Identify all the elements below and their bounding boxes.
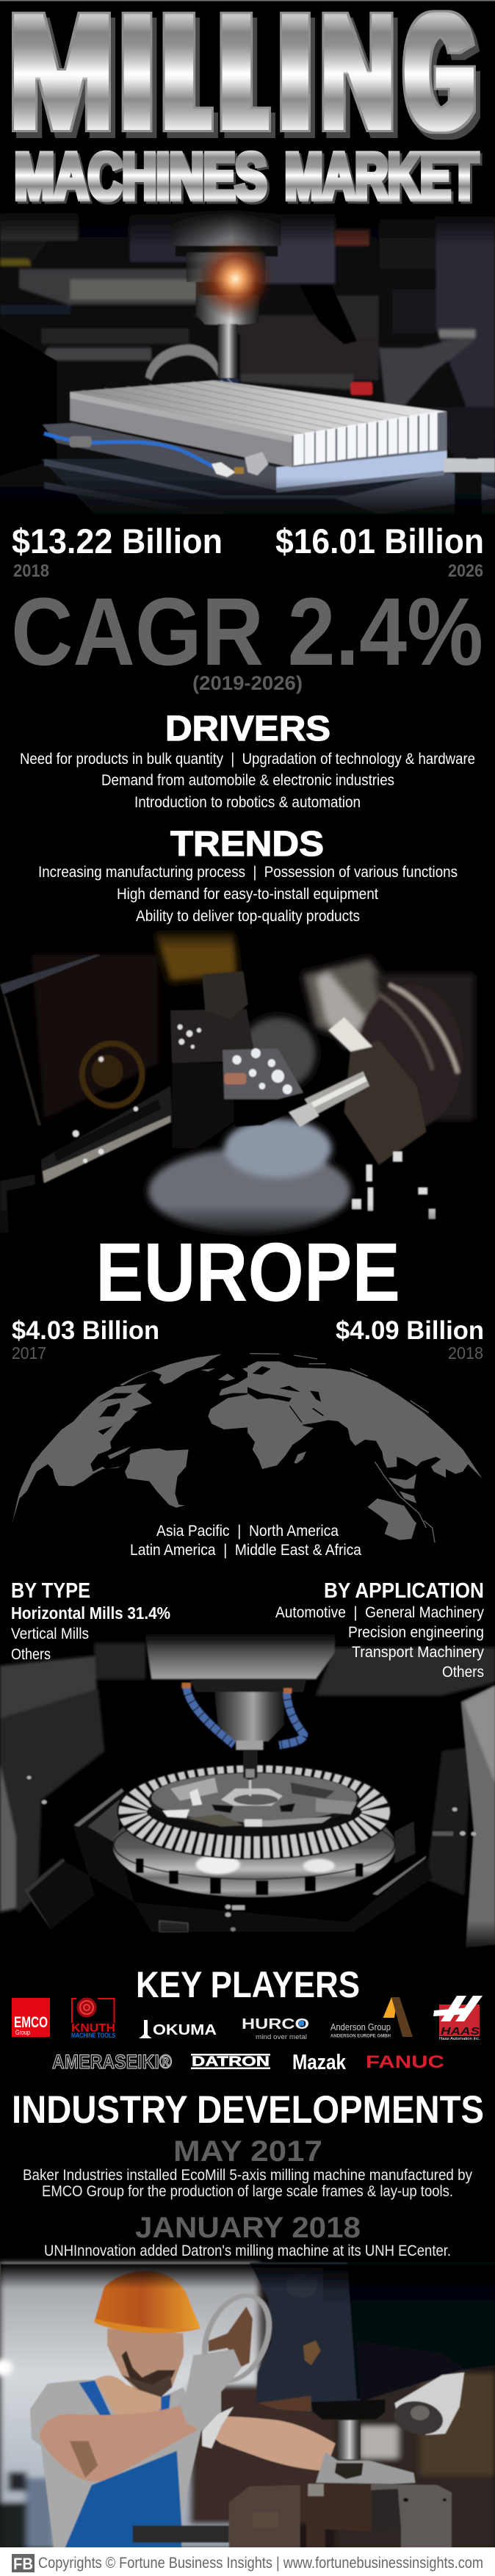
footer bar bbox=[0, 2547, 495, 2576]
other regions list: Asia Pacific | North America bbox=[156, 1523, 339, 1540]
photo: bevel gear on CNC milling table bbox=[0, 1620, 495, 1971]
application list: Transport Machinery bbox=[352, 1644, 484, 1661]
panel: by type bbox=[11, 1579, 170, 1663]
trends list bbox=[38, 864, 458, 925]
market size 2026 bbox=[275, 522, 484, 581]
logo: Anderson Group bbox=[330, 1997, 413, 2039]
Europe 2018 value: $4.09 Billion bbox=[336, 1316, 484, 1345]
market size 2026: $16.01 Billion bbox=[275, 522, 484, 560]
drivers list: Introduction to robotics & automation bbox=[134, 794, 361, 811]
panel: company logos bbox=[12, 1996, 483, 2074]
drivers list: Demand from automobile & electronic industries bbox=[101, 772, 394, 789]
panel: drivers bbox=[20, 710, 475, 811]
CAGR period: (2019-2026) bbox=[192, 672, 303, 694]
Europe 2017 value: 2017 bbox=[12, 1343, 46, 1363]
heading: drivers: DRIVERS bbox=[165, 710, 330, 748]
logo: KNUTH bbox=[71, 1998, 115, 2039]
title line one: MILLING bbox=[8, 0, 472, 165]
logo: Anderson Group: ANDERSON EUROPE GMBH bbox=[330, 2033, 391, 2039]
type list: Horizontal Mills 31.4% bbox=[11, 1603, 170, 1623]
logo: HAAS bbox=[433, 1996, 483, 2041]
development: January 2018: JANUARY 2018 bbox=[135, 2212, 361, 2244]
application list: Others bbox=[442, 1664, 484, 1681]
title: chrome lettering bbox=[8, 0, 478, 214]
logo: KNUTH: MACHINE TOOLS bbox=[71, 2032, 115, 2039]
logo: HURCO: mind over metal bbox=[256, 2033, 307, 2041]
heading: key players: KEY PLAYERS bbox=[136, 1964, 360, 2005]
Europe 2017 value bbox=[12, 1316, 159, 1363]
application list bbox=[275, 1604, 484, 1681]
panel: trends bbox=[38, 825, 458, 925]
market size 2018 bbox=[12, 522, 223, 581]
other regions list: Latin America | Middle East & Africa bbox=[130, 1542, 361, 1559]
logo: EMCO bbox=[12, 1998, 50, 2037]
trends list: High demand for easy-to-install equipment bbox=[117, 886, 378, 903]
development: January 2018 bbox=[44, 2212, 451, 2259]
fades bbox=[0, 1620, 495, 1648]
photo: worker operating milling machine bbox=[0, 2262, 495, 2549]
logo: HAAS: Haas Automation Inc. bbox=[439, 2037, 480, 2041]
photo: lathe tool with metal chips bbox=[0, 924, 495, 1260]
development: May 2017: MAY 2017 bbox=[173, 2135, 322, 2168]
logo: HURCO bbox=[242, 2016, 309, 2041]
heading: by type: BY TYPE bbox=[11, 1579, 90, 1603]
logo: HURCO: HURCO bbox=[242, 2016, 309, 2032]
panel: by application bbox=[275, 1579, 484, 1681]
fades bbox=[0, 2264, 495, 2289]
logo: HAAS: HAAS bbox=[441, 2025, 480, 2038]
logo: Datron: DATRON bbox=[192, 2054, 270, 2068]
photo fades bbox=[0, 209, 495, 245]
Europe 2018 value bbox=[336, 1316, 484, 1363]
logo: EMCO: EMCO bbox=[14, 2014, 48, 2031]
title line two: MACHINES MARKET: MACHINES bbox=[15, 140, 267, 214]
logo: Mazak: Mazak bbox=[292, 2051, 347, 2074]
logo: Fortune Business Insights: FB bbox=[13, 2555, 33, 2573]
market size 2018: 2018 bbox=[13, 561, 49, 581]
type list bbox=[11, 1603, 170, 1663]
type list: Vertical Mills bbox=[11, 1626, 89, 1642]
logo: EMCO: Group bbox=[15, 2029, 30, 2036]
logo: KNUTH: KNUTH bbox=[71, 2022, 115, 2035]
logo: Amera Seiki: AMERASEIKI® bbox=[52, 2051, 172, 2073]
type list: Others bbox=[11, 1646, 51, 1663]
Europe 2017 value: $4.03 Billion bbox=[12, 1316, 159, 1345]
logo: OKUMA bbox=[139, 2020, 217, 2038]
fades bbox=[0, 924, 495, 949]
logo: Anderson Group: Anderson Group bbox=[330, 2021, 391, 2032]
photo: milling machine spindle over aluminium block bbox=[0, 209, 495, 523]
heading: trends: TRENDS bbox=[170, 825, 324, 864]
other regions list bbox=[130, 1523, 361, 1559]
market size 2026: 2026 bbox=[448, 561, 483, 581]
logo: OKUMA: OKUMA bbox=[153, 2022, 217, 2038]
market size 2018: $13.22 Billion bbox=[12, 522, 223, 560]
logo: Datron bbox=[191, 2054, 270, 2069]
icon: world globe map bbox=[12, 1354, 483, 1543]
trends list: Increasing manufacturing process | Possession of various functions bbox=[38, 864, 458, 881]
heading: Europe: EUROPE bbox=[95, 1226, 400, 1318]
trends list: Ability to deliver top-quality products bbox=[136, 908, 360, 925]
development: May 2017 bbox=[23, 2135, 472, 2200]
title backdrop bbox=[0, 0, 495, 210]
logo: FANUC: FANUC bbox=[366, 2052, 444, 2072]
drivers list bbox=[20, 751, 475, 811]
Europe 2018 value: 2018 bbox=[448, 1343, 483, 1363]
application list: Precision engineering bbox=[348, 1624, 484, 1641]
